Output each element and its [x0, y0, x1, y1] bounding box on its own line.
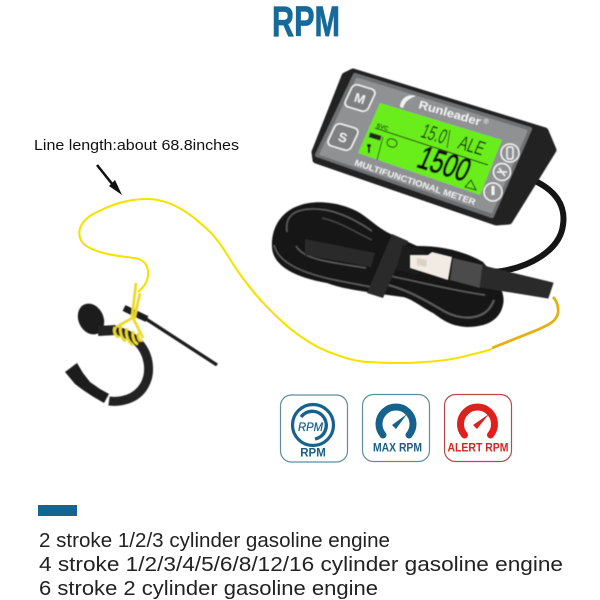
gray connector sleeve: [450, 258, 483, 288]
LCD dividers: [375, 128, 488, 165]
button M: [343, 84, 377, 112]
battery icon: [369, 132, 382, 141]
plug connector: [65, 363, 109, 403]
cable highlights: [274, 209, 494, 318]
meter output cable: [495, 180, 563, 272]
yellow wire: [79, 199, 492, 363]
icon card: RPM: RPM: [298, 420, 323, 434]
accent bar: [38, 505, 77, 516]
engine compatibility list: 4 stroke 1/2/3/4/5/6/8/12/16 cylinder gasoline engine: [39, 554, 563, 576]
arrow: [97, 165, 122, 195]
button M: M: [352, 90, 367, 107]
button S: S: [337, 129, 350, 146]
service value: 15.0: [417, 120, 451, 149]
warning icon: [465, 180, 476, 190]
velcro strap: [367, 234, 408, 298]
icon card: ALERT RPM: ALERT RPM: [448, 442, 508, 454]
engine compatibility list: 2 stroke 1/2/3 cylinder gasoline engine: [39, 530, 390, 552]
white connector: [410, 252, 553, 298]
heat shrink tube: [305, 239, 375, 267]
icon card: ALERT RPM: [444, 394, 512, 462]
coiled black cable: [272, 202, 504, 327]
icon card: RPM: [280, 395, 348, 462]
icon card: RPM: RPM: [300, 448, 326, 460]
icon card: MAX RPM: MAX RPM: [373, 442, 422, 454]
icon card: MAX RPM: [362, 394, 430, 462]
plug cap: [73, 299, 109, 339]
yellow coil: [114, 283, 143, 345]
wire end sleeve: [492, 297, 558, 348]
alert label: ALE: [455, 132, 488, 160]
registered mark: ®: [482, 117, 490, 127]
meter body: [315, 72, 553, 222]
plug cable: [109, 331, 149, 401]
brand name: Runleader: [417, 99, 483, 129]
status icons: [484, 144, 519, 201]
engine compatibility list: [39, 530, 563, 600]
engine compatibility list: 6 stroke 2 cylinder gasoline engine: [39, 578, 378, 600]
meter caption: MULTIFUNCTIONAL METER: [353, 157, 477, 207]
LCD screen: [358, 103, 502, 195]
face: [321, 79, 526, 212]
SVC label: SVC: [375, 123, 390, 133]
meter: [315, 72, 553, 222]
logo leaf: [400, 95, 416, 108]
spark plug boot and cable: [65, 283, 217, 403]
black sleeve: [480, 266, 553, 298]
rpm value: 1500: [412, 139, 477, 188]
zip tie: [124, 308, 217, 365]
clock icon: [386, 138, 398, 148]
bezel: [317, 75, 530, 216]
key icon: [367, 144, 371, 153]
wire length label: Line length:about 68.8inches: [34, 138, 239, 154]
button S: [326, 123, 360, 151]
